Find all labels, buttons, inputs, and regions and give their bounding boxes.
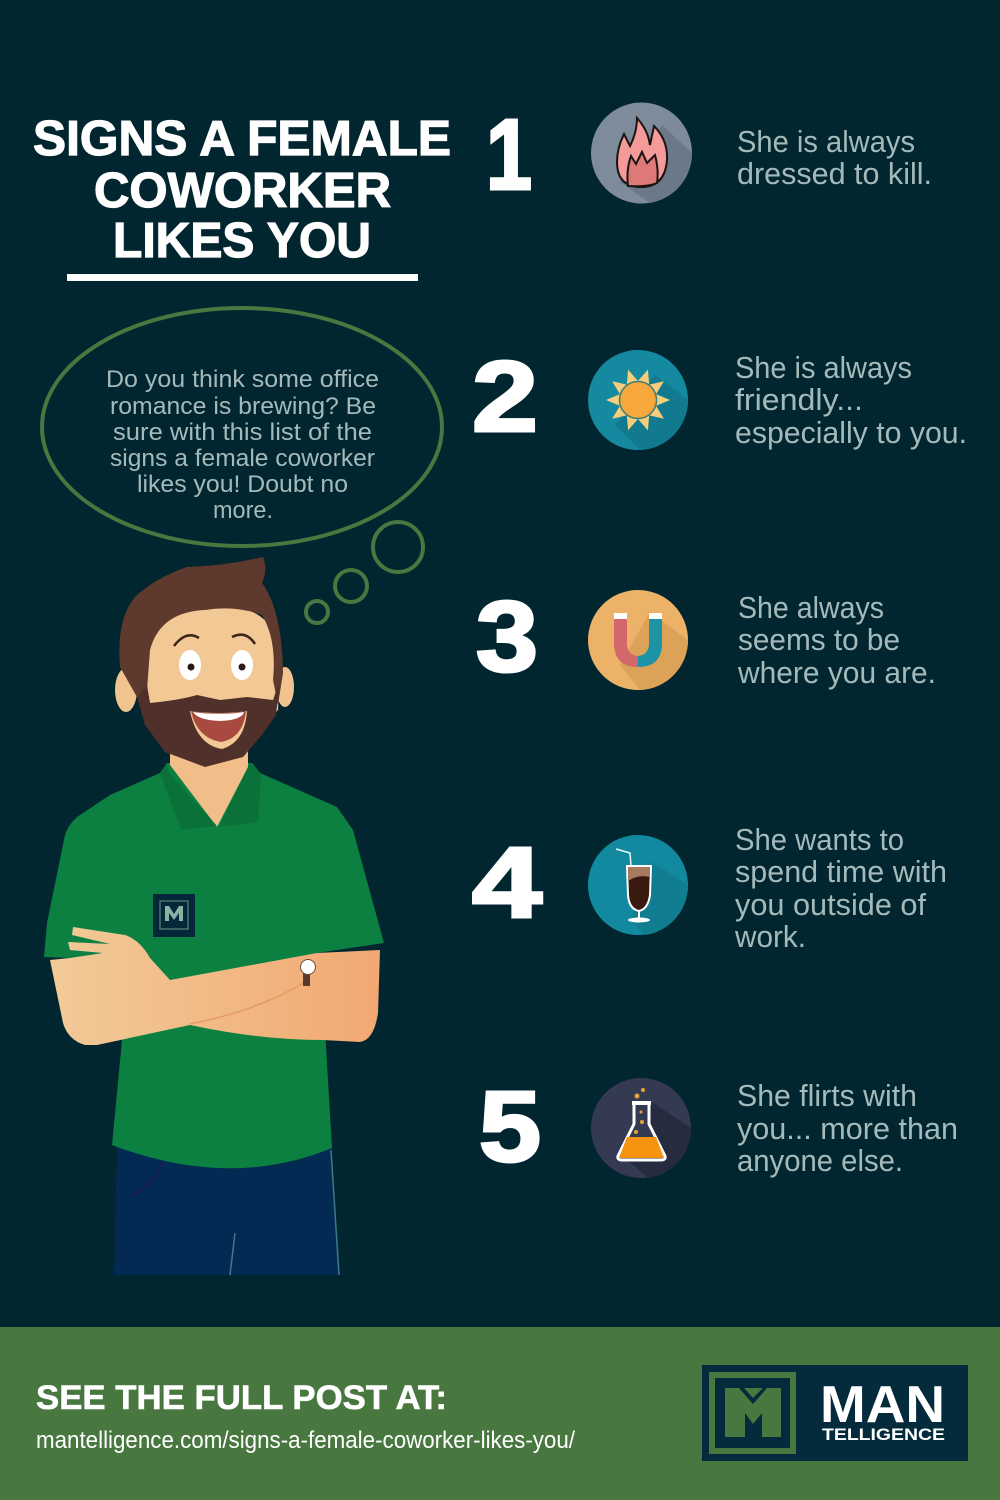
beard (137, 680, 280, 767)
number 4: 4 (472, 827, 542, 939)
sign 4 (472, 822, 947, 954)
text (734, 822, 947, 954)
sign 5 (479, 1071, 958, 1183)
sign 1 (486, 99, 932, 211)
face (145, 605, 281, 750)
icon: chocolate drink (588, 835, 688, 935)
text: She is always (737, 124, 915, 159)
text (737, 124, 932, 191)
text: you outside of (735, 887, 926, 922)
text: you... more than (737, 1111, 958, 1146)
text: work. (734, 919, 806, 954)
footer band (0, 1327, 1000, 1500)
icon: sun (588, 350, 688, 450)
thought bubble: Do you think some office (106, 366, 379, 393)
logo (702, 1365, 968, 1461)
text: dressed to kill. (737, 156, 932, 191)
hair (119, 557, 283, 705)
thought bubble: more. (213, 497, 273, 524)
title: SIGNS A FEMALE (33, 112, 451, 166)
ears (115, 667, 294, 712)
number 5: 5 (479, 1071, 541, 1183)
mouth (190, 711, 247, 749)
wristwatch (300, 960, 316, 986)
title: COWORKER (94, 164, 391, 218)
title (33, 112, 451, 281)
text: friendly... (735, 382, 863, 417)
text: especially to you. (735, 415, 967, 450)
green shirt (44, 763, 384, 1168)
shirt collar (160, 763, 261, 830)
number 3: 3 (476, 581, 538, 693)
text: She is always (735, 350, 912, 385)
neck (170, 745, 248, 827)
text (737, 590, 936, 690)
icon: magnet (588, 590, 688, 690)
icon: flame (591, 102, 692, 204)
logo: MAN (820, 1376, 945, 1434)
eyes (174, 635, 255, 680)
thought bubble (42, 308, 442, 623)
crossed arms (50, 927, 380, 1045)
text (737, 1078, 958, 1178)
thought bubble: romance is brewing? Be (110, 393, 376, 420)
sign 3 (476, 581, 936, 693)
text: anyone else. (737, 1143, 903, 1178)
title: LIKES YOU (113, 214, 371, 268)
illustration: smiling bearded man (44, 557, 384, 1275)
text: She flirts with (737, 1078, 917, 1113)
trousers (114, 1145, 339, 1275)
footer heading: SEE THE FULL POST AT: (36, 1379, 447, 1417)
logo: TELLIGENCE (822, 1425, 945, 1444)
text (735, 350, 967, 450)
sign 2 (472, 341, 967, 453)
number 1: 1 (486, 99, 532, 211)
thought bubble: signs a female coworker (110, 445, 375, 472)
thought bubble: sure with this list of the (113, 419, 372, 446)
thought bubble: likes you! Doubt no (137, 471, 348, 498)
text: where you are. (737, 655, 936, 690)
icon: flask (591, 1078, 691, 1178)
text: She always (738, 590, 884, 625)
text: seems to be (738, 622, 900, 657)
text: She wants to (735, 822, 904, 857)
number 2: 2 (472, 341, 538, 453)
shirt logo badge (153, 894, 195, 937)
text: spend time with (735, 854, 947, 889)
footer url: mantelligence.com/signs-a-female-coworker-likes-you/ (36, 1427, 575, 1454)
